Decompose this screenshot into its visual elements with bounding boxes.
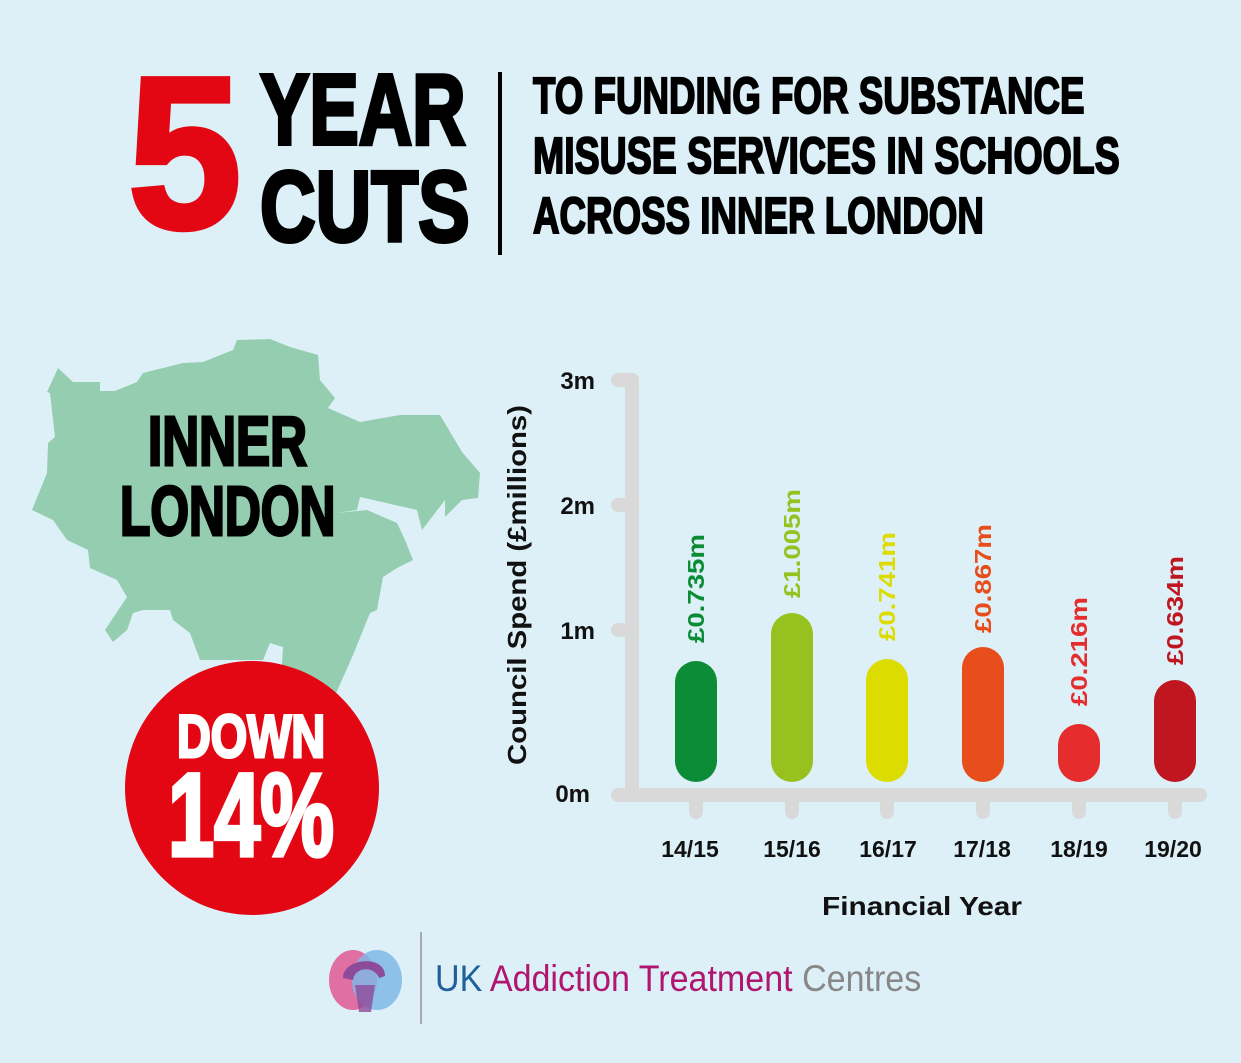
bar value labels: £0.634m (1163, 556, 1188, 665)
bar value labels: £0.735m (684, 534, 709, 643)
x axis labels: 16/17 (859, 836, 917, 862)
logo text: UK Addiction Treatment Centres (435, 958, 921, 999)
bar value labels (684, 489, 1188, 706)
y axis ticks: 0m (555, 781, 590, 808)
bar value labels: £0.741m (875, 532, 900, 641)
logo (329, 932, 921, 1024)
x axis labels (661, 836, 1202, 862)
subtitle: ACROSS INNER LONDON (533, 187, 984, 244)
x axis labels: 17/18 (953, 836, 1011, 862)
callout: down 14% (125, 661, 379, 915)
bar chart: Council Spend (£millions) (502, 405, 532, 765)
y axis ticks: 1m (560, 618, 595, 645)
subtitle (532, 67, 1120, 244)
y axis ticks: 2m (560, 493, 595, 520)
bars (675, 613, 1196, 782)
subtitle: TO FUNDING FOR SUBSTANCE (533, 67, 1084, 124)
x axis labels: 15/16 (763, 836, 821, 862)
axis titles: Financial Year (822, 891, 1022, 921)
map: inner london (32, 339, 480, 693)
YEAR CUTS: YEAR (260, 54, 466, 166)
title (128, 33, 1120, 274)
icon: hands heart (329, 950, 402, 1012)
y axis ticks: 3m (560, 368, 595, 395)
YEAR CUTS (259, 54, 470, 263)
bar value labels: £1.005m (780, 489, 805, 598)
map label (120, 402, 335, 550)
map label: INNER (148, 402, 307, 480)
y axis ticks (555, 368, 595, 808)
x axis labels: 19/20 (1144, 836, 1202, 862)
map label: LONDON (120, 472, 335, 550)
bar value labels: £0.867m (971, 524, 996, 633)
YEAR CUTS: CUTS (260, 151, 470, 263)
x axis labels: 18/19 (1050, 836, 1108, 862)
big number 5: 5 (128, 33, 241, 274)
x axis labels: 14/15 (661, 836, 719, 862)
callout: down 14%: DOWN (177, 703, 325, 770)
divider (498, 72, 502, 255)
bar value labels: £0.216m (1067, 597, 1092, 706)
callout: down 14%: 14% (168, 750, 334, 881)
subtitle: MISUSE SERVICES IN SCHOOLS (533, 127, 1120, 184)
